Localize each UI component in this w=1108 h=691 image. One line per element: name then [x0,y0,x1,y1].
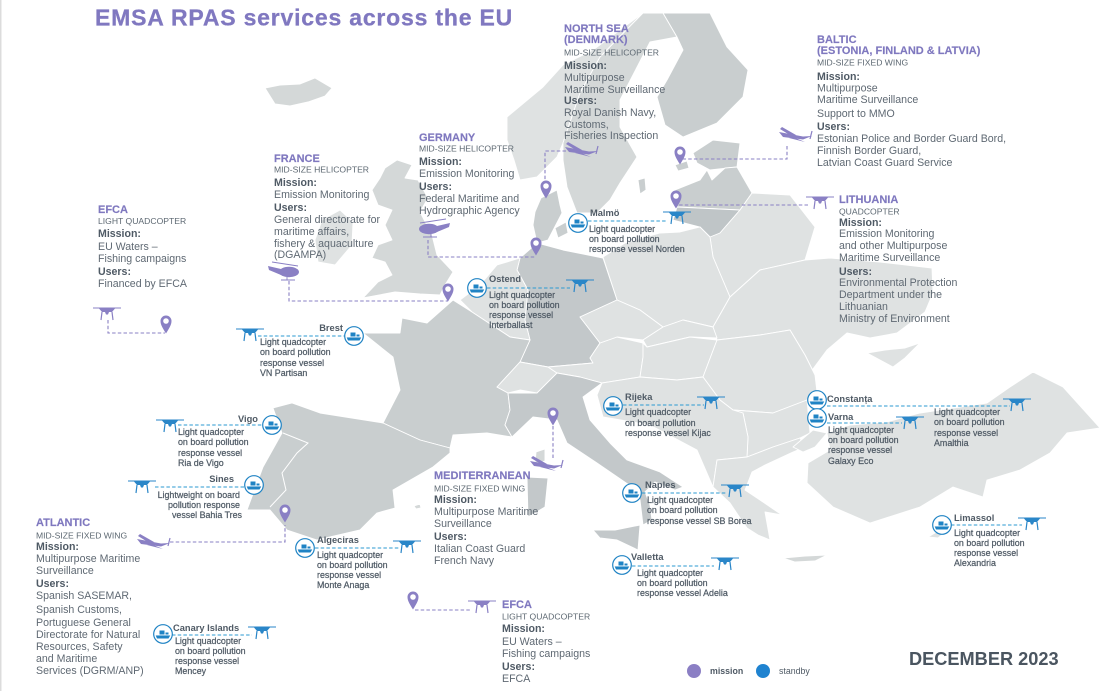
panel: Baltic: Multipurpose [817,82,878,94]
panel: Germany: Federal Maritime and [419,193,519,205]
panel: Mediterranean [434,470,538,567]
station: Canary Islands: Mencey [175,666,207,676]
panel: EFCA left [98,204,188,290]
station: Sines: pollution response [168,500,240,510]
station: Vigo: Ria de Vigo [178,458,224,468]
station: Constanța: Light quadcopter [934,407,1000,417]
panel: Baltic: Maritime Surveillance [817,94,918,106]
station: Canary Islands [154,623,276,676]
station: Valletta: Valletta [631,552,664,562]
station: Algeciras: response vessel [317,570,381,580]
station: Malmö [569,208,691,254]
station: Varna: Galaxy Eco [828,456,873,466]
panel: Lithuania: Maritime Surveillance [839,252,940,264]
panel: Atlantic: Users: [36,578,69,590]
panel: EFCA bottom: EU Waters – [502,636,562,648]
panel: EFCA bottom: LIGHT QUADCOPTER [502,612,590,622]
station: Ostend: Ostend [489,274,521,284]
station: Algeciras [296,535,421,590]
panel: Mediterranean: Users: [434,531,467,543]
panel: Mediterranean: MID-SIZE FIXED WING [434,484,526,494]
station: Algeciras: Light quadcopter [317,550,383,560]
station: Algeciras: Algeciras [317,535,359,545]
station: Ostend: response vessel [489,310,553,320]
station: Limassol [933,513,1046,568]
panel: EFCA left: EFCA [98,204,128,216]
station: Sines: Sines [209,474,234,484]
station: Brest: on board pollution [260,347,331,357]
station: Limassol: response vessel [954,548,1018,558]
panel: Germany: Emission Monitoring [419,168,514,180]
panel: Lithuania: Ministry of Environment [839,313,950,325]
panel: Atlantic: ATLANTIC [36,517,90,529]
station: Varna: on board pollution [828,435,899,445]
station: Algeciras: Monte Anaga [317,580,369,590]
station: Ostend [468,274,594,330]
panel: Mediterranean: French Navy [434,555,495,567]
legend: standby [779,666,810,676]
station: Varna: Varna [828,412,854,422]
station: Ostend: on board pollution [489,300,560,310]
legend [687,664,810,678]
panel: Baltic: Support to MMO [817,108,895,120]
station: Varna: Light quadcopter [828,425,894,435]
panel: Lithuania: and other Multipurpose [839,240,947,252]
station: Constanța: Amalthia [934,438,969,448]
panel: Lithuania: LITHUANIA [839,194,898,206]
panel: France: FRANCE [274,153,320,165]
station: Rijeka [604,392,725,438]
station: Vigo: Light quadcopter [178,427,244,437]
panel: Mediterranean: Surveillance [434,518,492,530]
station: Valletta: response vessel Adelia [637,588,728,598]
panel: France: fishery & aquaculture [274,238,374,250]
station: Brest: Light quadcopter [260,337,326,347]
panel: North Sea: Maritime Surveillance [564,84,665,96]
legend: mission [710,666,743,676]
station: Vigo: response vessel [178,448,242,458]
station: Ostend: Light quadcopter [489,290,555,300]
panel: Lithuania: Emission Monitoring [839,228,934,240]
panel: Germany: Hydrographic Agency [419,205,520,217]
panel: Mediterranean: Italian Coast Guard [434,543,525,555]
panel: EFCA bottom: EFCA [502,673,531,685]
station: Vigo: Vigo [238,414,258,424]
panel: EFCA bottom: Mission: [502,623,545,635]
station: Sines [128,474,263,520]
station: Vigo [156,414,281,468]
panel: Baltic: Finnish Border Guard, [817,145,921,157]
station: Constanța: Constanța [827,394,873,404]
station: Rijeka: Rijeka [625,392,653,402]
station: Limassol: Light quadcopter [954,528,1020,538]
panel: Atlantic: Surveillance [36,565,94,577]
panel: Germany: Mission: [419,156,462,168]
panel: Lithuania: Lithuanian [839,301,888,313]
panel: Atlantic: Resources, Safety [36,641,123,653]
panel: North Sea: MID-SIZE HELICOPTER [564,48,659,58]
station: Brest: response vessel [260,358,324,368]
panel: Atlantic: Directorate for Natural [36,629,140,641]
station: Limassol: Limassol [954,513,994,523]
panel: Baltic: Users: [817,121,850,133]
panel: North Sea: (DENMARK) [564,34,628,46]
panel: Lithuania: Users: [839,266,872,278]
station: Canary Islands: response vessel [175,656,239,666]
station: Constanța: on board pollution [934,417,1005,427]
panel: Lithuania: Environmental Protection [839,277,957,289]
panel: Baltic [817,34,1006,169]
station: Naples: on board pollution [647,505,718,515]
panel: Baltic: Estonian Police and Border Guard Bord, [817,133,1006,145]
mission link: France [268,262,454,302]
station: Valletta [613,552,739,598]
station: Brest: Brest [319,323,343,333]
panel: Atlantic: Services (DGRM/ANP) [36,665,144,677]
panel: EFCA bottom [502,599,590,685]
panel: Germany: Users: [419,181,452,193]
station: Sines: vessel Bahia Tres [172,510,243,520]
panel: North Sea: Mission: [564,60,607,72]
panel: Atlantic: Spanish SASEMAR, [36,590,132,602]
station: Canary Islands: on board pollution [175,646,246,656]
panel: North Sea: Users: [564,95,597,107]
mission link: EFCA bottom [408,592,496,613]
panel: France: Users: [274,202,307,214]
mission link: Germany [419,219,542,257]
station: Naples: Naples [645,480,676,490]
mission link: Baltic [674,127,812,164]
panel: Lithuania: Mission: [839,217,882,229]
panel: Germany [419,132,520,217]
panel: Baltic: MID-SIZE FIXED WING [817,58,909,68]
panel: Atlantic: and Maritime [36,653,97,665]
panel: EFCA bottom: Users: [502,661,535,673]
panel: Germany: MID-SIZE HELICOPTER [419,144,514,154]
station: Brest [236,323,363,378]
map of Europe [247,13,1100,562]
station: Algeciras: on board pollution [317,560,388,570]
panel: EFCA bottom: Fishing campaigns [502,648,590,660]
panel: North Sea [564,23,665,142]
panel: EFCA left: Mission: [98,228,141,240]
station: Malmö: on board pollution [589,234,660,244]
panel: Atlantic: Mission: [36,541,79,553]
station: Sines: Lightweight on board [158,490,240,500]
station: Naples: Light quadcopter [647,495,713,505]
station: Brest: VN Partisan [260,368,307,378]
date: DECEMBER 2023 [909,649,1059,669]
panel: North Sea: Multipurpose [564,72,625,84]
station: Ostend: Interballast [489,320,533,330]
panel: Lithuania [839,194,957,325]
station: Varna: response vessel [828,445,892,455]
panel: Atlantic: Multipurpose Maritime [36,553,140,565]
panel: Baltic: Mission: [817,71,860,83]
panel: EFCA left: EU Waters – [98,241,158,253]
panel: EFCA left: LIGHT QUADCOPTER [98,216,186,226]
panel: Baltic: BALTIC [817,34,857,46]
panel: Lithuania: QUADCOPTER [839,206,900,216]
panel: Lithuania: Department under the [839,289,942,301]
mission link: Lithuania [670,190,834,209]
panel: Atlantic: Portuguese General [36,617,131,629]
station: Canary Islands: Light quadcopter [175,636,241,646]
station: Valletta: Light quadcopter [637,568,703,578]
panel: EFCA left: Users: [98,266,131,278]
station: Limassol: Alexandria [954,558,996,568]
panel: Mediterranean: Mission: [434,494,477,506]
title: EMSA RPAS services across the EU [95,4,513,30]
station: Limassol: on board pollution [954,538,1025,548]
panel: North Sea: Fisheries Inspection [564,130,658,142]
panel: Baltic: (ESTONIA, FINLAND & LATVIA) [817,45,981,57]
panel: France: maritime affairs, [274,226,349,238]
station: Malmö: Malmö [590,208,620,218]
station: Naples [623,480,752,526]
panel: Germany: GERMANY [419,132,476,144]
panel: Baltic: Latvian Coast Guard Service [817,157,953,169]
station: Constanța: response vessel [934,428,998,438]
station: Canary Islands: Canary Islands [173,623,239,633]
panel: North Sea: Customs, [564,119,609,131]
panel: EFCA left: Fishing campaigns [98,253,186,265]
panel: EFCA bottom: EFCA [502,599,532,611]
panel: France: Emission Monitoring [274,189,369,201]
panel: France: Mission: [274,177,317,189]
panel: France: General directorate for [274,214,380,226]
panel: Atlantic [36,517,144,677]
station: Constanța [808,391,1031,448]
panel: France [274,153,380,261]
panel: France: (DGAMPA) [274,249,326,261]
station: Naples: response vessel SB Borea [647,516,752,526]
mission link: Mediterranean [530,408,563,471]
panel: North Sea: NORTH SEA [564,23,629,35]
panel: EFCA left: Financed by EFCA [98,278,188,290]
panel: Mediterranean: MEDITERRANEAN [434,470,531,482]
station: Rijeka: response vessel Kijac [625,428,711,438]
mission link: Atlantic [137,504,290,549]
panel: France: MID-SIZE HELICOPTER [274,164,369,174]
station: Malmö: response vessel Norden [589,244,685,254]
mission link: North Sea [540,142,598,198]
panel: Atlantic: MID-SIZE FIXED WING [36,530,128,540]
station: Rijeka: Light quadcopter [625,407,691,417]
panel: Atlantic: Spanish Customs, [36,604,122,616]
station: Varna [808,409,924,466]
station: Malmö: Light quadcopter [589,224,655,234]
station: Valletta: on board pollution [637,578,708,588]
panel: North Sea: Royal Danish Navy, [564,107,656,119]
station: Vigo: on board pollution [178,437,249,447]
station: Rijeka: on board pollution [625,418,696,428]
mission link: EFCA left [93,308,172,334]
panel: Mediterranean: Multipurpose Maritime [434,506,538,518]
